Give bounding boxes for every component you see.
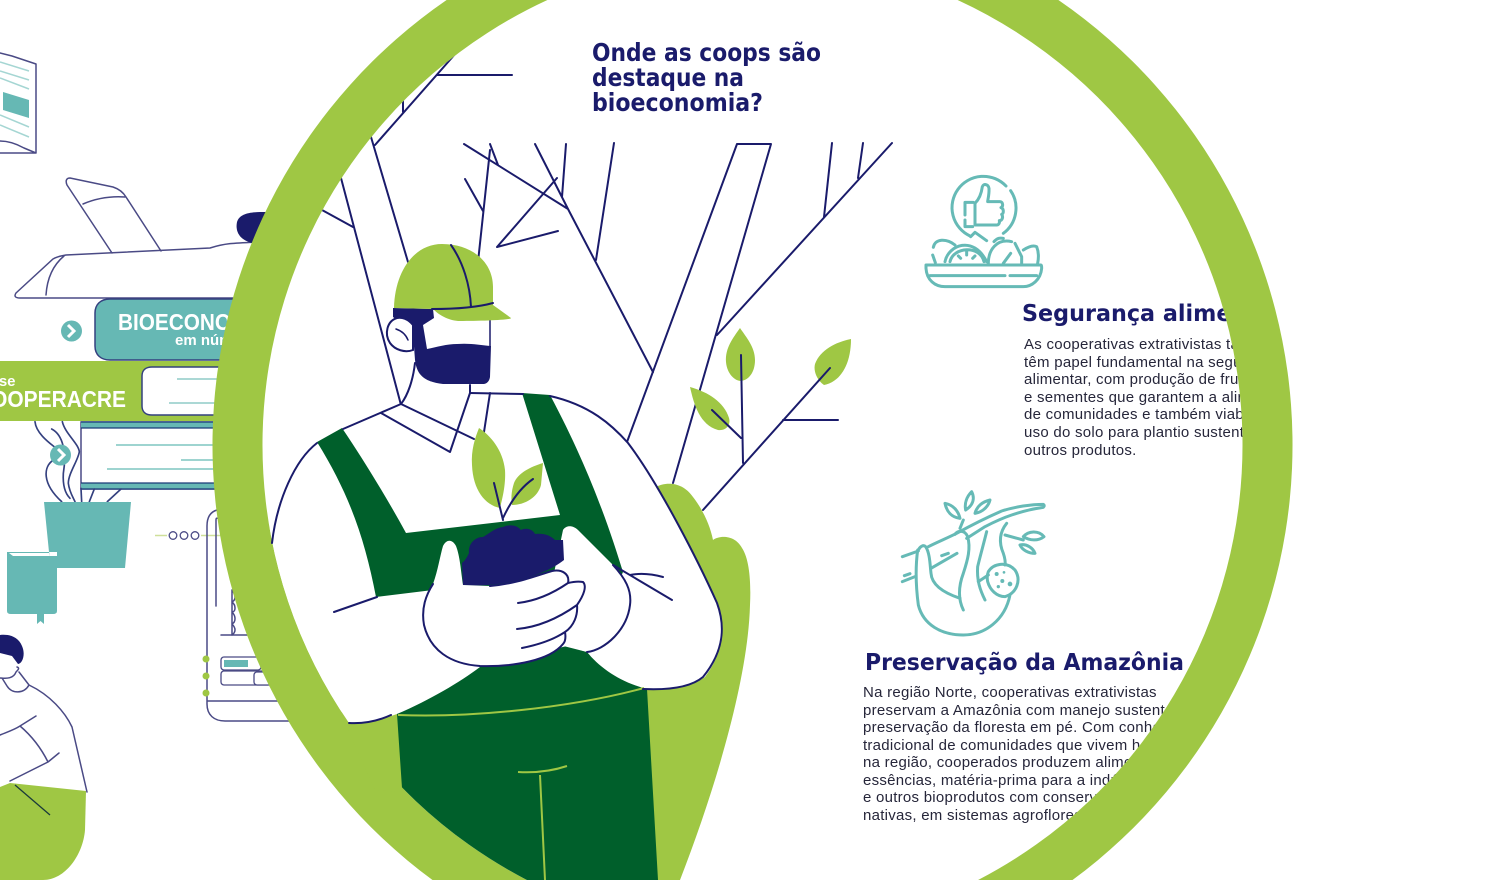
text block: segurança alimentar (1024, 304, 1242, 458)
text block: segurança alimentar: As cooperativas extrativistas também (1024, 336, 1282, 353)
text block: preservação da amazônia: Preservação da Amazônia (865, 650, 1184, 676)
belt and pocket stitching (398, 688, 644, 880)
lime ring right arc (958, 0, 1293, 880)
text block: segurança alimentar: uso do solo para plantio sustentável de (1024, 424, 1294, 441)
icon: sloth hanging from branch (902, 492, 1044, 635)
shirt body (265, 393, 722, 723)
text block: preservação da amazônia: preservam a Amazônia com manejo sustentável e (863, 702, 1207, 719)
title: Onde as coops são (592, 38, 821, 67)
small branch with three leaves (690, 328, 851, 510)
text block: preservação da amazônia: na região, cooperados produzem alimentos, (863, 754, 1166, 771)
outline of shirt and arms (272, 393, 722, 723)
overalls trousers (397, 646, 658, 880)
neck and collar (381, 363, 490, 452)
hat seams (432, 245, 493, 309)
text block: preservação da amazônia: e outros bioprodutos com conservação de espécies (863, 789, 1218, 806)
title (592, 38, 821, 117)
text block: segurança alimentar: alimentar, com produção de frutas (1024, 371, 1259, 388)
ear detail and face edge (396, 320, 490, 346)
text block: preservação da amazônia: preservação da floresta em pé. Com conhecimento (863, 719, 1215, 736)
book: case Cooperacre (0, 361, 240, 421)
soil clump (462, 525, 564, 585)
lime patch under shirt hem (340, 712, 404, 792)
far hand (540, 526, 630, 652)
farmer holding seedling (265, 244, 722, 880)
left illustration: books, plane, phone and reader (0, 53, 300, 880)
book: white stack book (81, 422, 241, 489)
seated reader figure (0, 635, 87, 880)
plant in teal pot (35, 422, 131, 568)
title: bioeconomia? (592, 88, 763, 117)
icon: arrow button one (61, 320, 82, 342)
text block: preservação da amazônia: Na região Norte, cooperativas extrativistas (863, 684, 1157, 701)
hard hat (394, 244, 511, 321)
text block: segurança alimentar: outros produtos. (1024, 442, 1137, 459)
icon: thumbs up over food bowl (926, 176, 1042, 287)
text block: preservação da amazônia: essências, matéria-prima para a indústria (863, 772, 1149, 789)
text block: preservação da amazônia (863, 651, 1182, 823)
lime ring left arc (212, 0, 547, 880)
bare tree branches (322, 53, 892, 483)
text block: segurança alimentar: Segurança alimentar (1022, 301, 1285, 327)
seedling leaves (472, 428, 505, 508)
text block: segurança alimentar: e sementes que garantem a alimentação (1024, 389, 1305, 406)
icon: closed teal book (7, 552, 57, 624)
near hand (423, 541, 585, 666)
book: bioeconomia em números: BIOECONOMIA (118, 309, 269, 335)
book: bioeconomia em números (95, 299, 269, 360)
title: destaque na (592, 63, 744, 92)
overalls bib and straps (317, 393, 623, 600)
seedling stems (494, 479, 533, 520)
text block: segurança alimentar: de comunidades e também viabilizam o (1024, 406, 1297, 423)
book: bioeconomia em números: em números (175, 332, 264, 349)
bush behind farmer (640, 484, 750, 880)
ear (387, 318, 413, 351)
icon: open magazine (0, 53, 36, 153)
text block: segurança alimentar: têm papel fundamental na segurança (1024, 354, 1281, 371)
beard and hair (393, 308, 491, 384)
panel: white circle inside lime ring (262, 0, 1243, 880)
icon: paper plane (15, 178, 266, 298)
text block: preservação da amazônia: nativas, em sistemas agroflorestais. (863, 807, 1111, 824)
near hand outline (423, 571, 585, 666)
text block: preservação da amazônia: tradicional de comunidades que vivem há gerações (863, 737, 1217, 754)
phone with stacked books (202, 510, 300, 721)
status dots connector (155, 532, 222, 539)
icon: arrow button two (50, 444, 71, 466)
